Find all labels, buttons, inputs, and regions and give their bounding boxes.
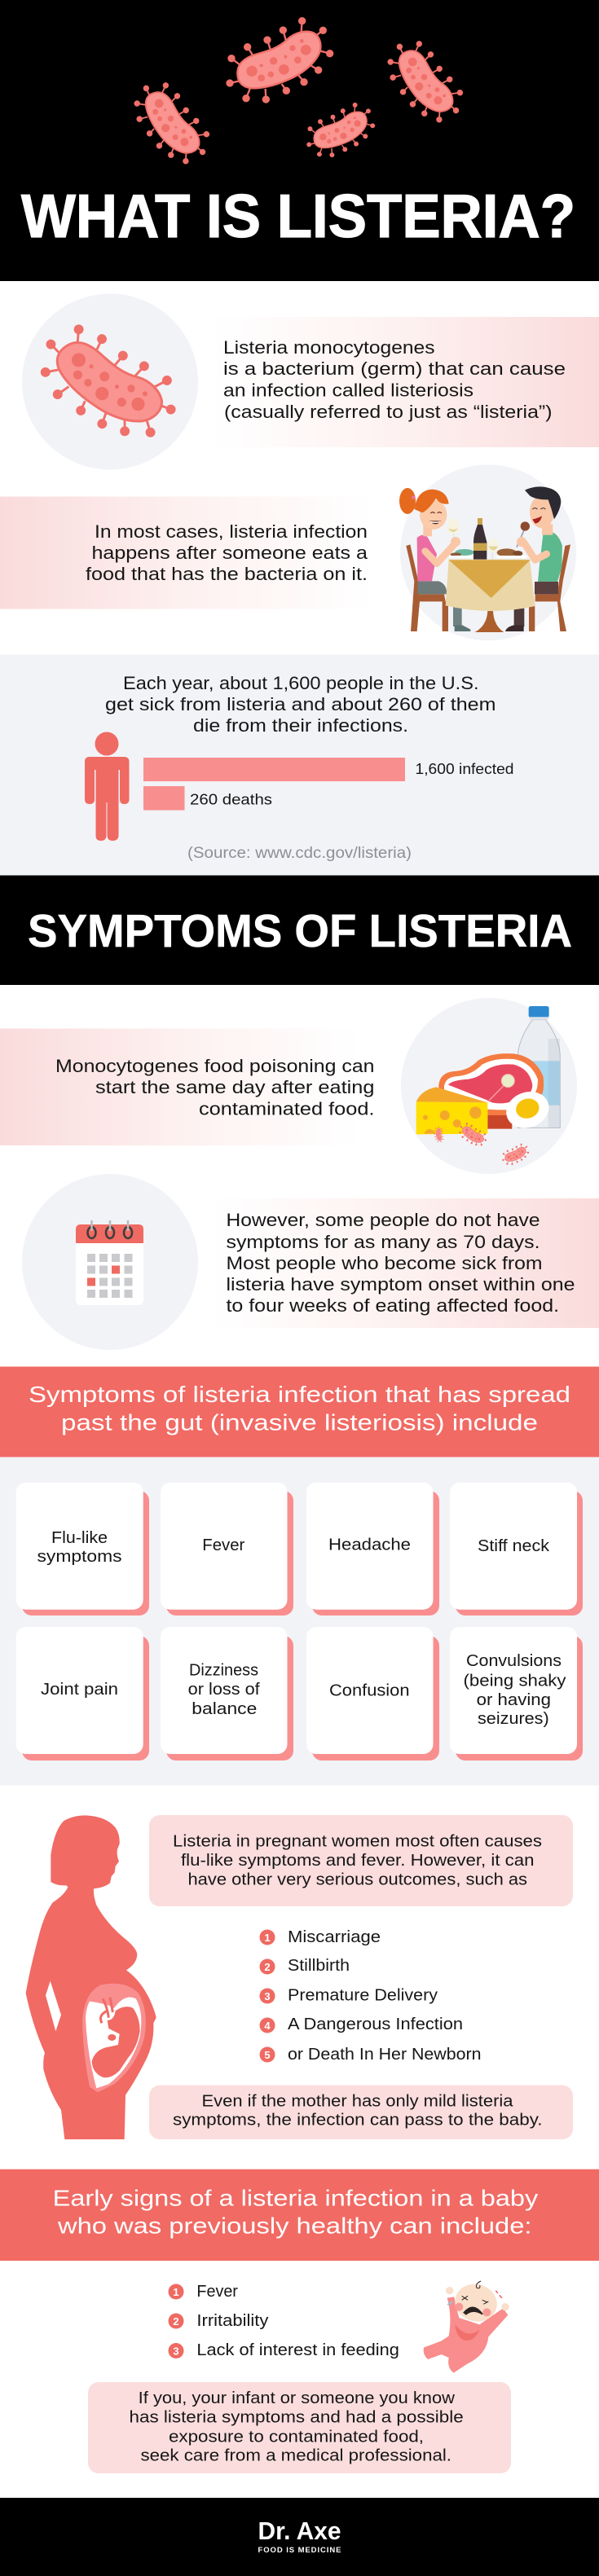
card: stiff neck: Stiff neck bbox=[478, 1537, 550, 1555]
text block: definition: (casually referred to just as “listeria”) bbox=[224, 402, 553, 422]
numbered list: outcomes: 3 bbox=[264, 1990, 271, 2002]
numbered list: baby signs: Lack of interest in feeding bbox=[196, 2341, 399, 2359]
numbered list: baby signs: 2 bbox=[173, 2315, 179, 2328]
card: fever: Fever bbox=[202, 1536, 245, 1554]
text block: delayed symptoms: to four weeks of eating affected food. bbox=[227, 1295, 559, 1316]
card: stiff neck bbox=[450, 1483, 583, 1615]
numbered list: outcomes: or Death In Her Newborn bbox=[288, 2046, 481, 2064]
callout: transmission to baby bbox=[149, 2086, 573, 2139]
card: convulsions: seizures) bbox=[478, 1710, 549, 1728]
bar chart: infected and deaths: 260 deaths bbox=[190, 792, 272, 808]
icon: right bacterium bbox=[383, 33, 468, 130]
icon: small bacterium bbox=[306, 103, 375, 157]
heading band: baby signs: Early signs of a listeria infection in a baby bbox=[53, 2185, 538, 2210]
panel: listeria definition bbox=[22, 293, 599, 470]
footer: Dr. Axe logo: FOOD IS MEDICINE bbox=[258, 2546, 341, 2555]
text block: definition: is a bacterium (germ) that can cause bbox=[223, 358, 566, 379]
numbered list: baby signs: 1 bbox=[173, 2286, 179, 2298]
panel: delayed symptoms bbox=[22, 1174, 599, 1350]
numbered list: outcomes: Premature Delivery bbox=[288, 1986, 438, 2004]
icon: calendar in circle bbox=[22, 1174, 198, 1350]
text block: definition: Listeria monocytogenes bbox=[223, 337, 435, 358]
footer: Dr. Axe logo bbox=[0, 2498, 599, 2576]
card: joint pain: Joint pain bbox=[41, 1681, 118, 1699]
text block: onset: contaminated food. bbox=[199, 1098, 375, 1119]
text block: delayed symptoms: symptoms for as many as 70 days. bbox=[227, 1232, 540, 1252]
text block: statistics bbox=[105, 673, 495, 736]
card: convulsions bbox=[450, 1627, 583, 1761]
numbered list: outcomes bbox=[259, 1928, 481, 2064]
illustration: crying baby bbox=[424, 2279, 509, 2373]
card: convulsions: or having bbox=[477, 1691, 551, 1709]
numbered list: outcomes: Stillbirth bbox=[288, 1957, 350, 1975]
callout: seek care: has listeria symptoms and had a possible bbox=[129, 2409, 464, 2427]
icon: bacterium in circle bbox=[22, 293, 198, 470]
icon: large bacterium bbox=[226, 17, 333, 103]
card: confusion bbox=[306, 1627, 439, 1761]
bar chart: infected and deaths: 1,600 infected bbox=[416, 761, 513, 777]
numbered list: outcomes: A Dangerous Infection bbox=[288, 2016, 463, 2033]
heading: SYMPTOMS OF LISTERIA bbox=[28, 905, 572, 957]
panel: symptom cards bbox=[0, 1457, 599, 1786]
text block: infection: In most cases, listeria infection bbox=[95, 521, 368, 542]
numbered list: baby signs: Fever bbox=[196, 2283, 238, 2301]
heading band: invasive listeriosis: Symptoms of listeria infection that has spread bbox=[29, 1382, 570, 1407]
numbered list: outcomes: 1 bbox=[264, 1932, 271, 1944]
callout: transmission to baby: symptoms, the infection can pass to the baby. bbox=[173, 2112, 543, 2130]
callout: pregnancy outcomes intro: Listeria in pregnant women most often causes bbox=[173, 1833, 542, 1851]
callout: seek care: seek care from a medical professional. bbox=[140, 2447, 451, 2465]
numbered list: outcomes: 4 bbox=[264, 2020, 271, 2032]
panel: baby symptoms bbox=[88, 2279, 511, 2473]
card: convulsions: Convulsions bbox=[466, 1652, 562, 1670]
card: headache bbox=[306, 1483, 439, 1615]
illustration: contaminated food bbox=[401, 998, 577, 1174]
text block: statistics: Each year, about 1,600 people in the U.S. bbox=[123, 673, 479, 693]
illustration: couple dining bbox=[399, 464, 576, 640]
callout: pregnancy outcomes intro bbox=[149, 1815, 573, 1906]
callout: seek care: exposure to contaminated food, bbox=[169, 2428, 424, 2446]
panel: food poisoning onset bbox=[0, 998, 577, 1174]
panel: how infection happens bbox=[0, 464, 576, 640]
numbered list: baby signs: 3 bbox=[173, 2345, 179, 2358]
footer: Dr. Axe logo: Dr. Axe bbox=[258, 2517, 341, 2545]
card: flu-like symptoms bbox=[16, 1483, 149, 1615]
card: fever bbox=[161, 1483, 293, 1615]
card: dizziness: Dizziness bbox=[189, 1662, 258, 1680]
card: flu-like symptoms: Flu-like bbox=[51, 1529, 108, 1547]
callout: seek care bbox=[88, 2382, 511, 2473]
text block: statistics: die from their infections. bbox=[193, 715, 408, 736]
bar chart: infected and deaths bbox=[143, 758, 513, 810]
panel: pregnancy bbox=[26, 1815, 573, 2139]
numbered list: outcomes: 5 bbox=[264, 2049, 271, 2061]
panel: symptoms header bbox=[0, 875, 599, 985]
text block: onset: Monocytogenes food poisoning can bbox=[55, 1056, 375, 1076]
heading band: baby signs bbox=[0, 2169, 599, 2261]
numbered list: outcomes: 2 bbox=[264, 1961, 271, 1973]
numbered list: baby signs: Irritability bbox=[196, 2312, 268, 2330]
card: headache: Headache bbox=[328, 1536, 411, 1554]
text block: onset: start the same day after eating bbox=[95, 1077, 374, 1097]
card: convulsions: (being shaky bbox=[463, 1672, 566, 1690]
text block: infection bbox=[86, 521, 368, 584]
card: flu-like symptoms: symptoms bbox=[37, 1548, 122, 1566]
card: dizziness bbox=[161, 1627, 293, 1761]
text block: delayed symptoms: Most people who become sick from bbox=[227, 1253, 543, 1273]
numbered list: outcomes: Miscarriage bbox=[288, 1928, 381, 1946]
numbered list: baby signs bbox=[168, 2283, 399, 2359]
text block: definition bbox=[223, 337, 566, 422]
text block: delayed symptoms: listeria have symptom onset within one bbox=[227, 1274, 575, 1295]
card: dizziness: or loss of bbox=[188, 1681, 260, 1699]
callout: pregnancy outcomes intro: flu-like symptoms and fever. However, it can bbox=[181, 1852, 535, 1870]
title: WHAT IS LISTERIA? bbox=[21, 182, 575, 250]
heading band: invasive listeriosis: past the gut (invasive listeriosis) include bbox=[61, 1409, 538, 1435]
icon: person bbox=[85, 732, 129, 841]
text block: infection: food that has the bacteria on it. bbox=[86, 564, 368, 584]
heading band: baby signs: who was previously healthy can include: bbox=[57, 2213, 532, 2239]
text block: infection: happens after someone eats a bbox=[91, 543, 368, 563]
card: dizziness: balance bbox=[192, 1700, 257, 1718]
text block: definition: an infection called listeriosis bbox=[223, 380, 473, 401]
panel: annual statistics bbox=[0, 655, 599, 875]
panel: title header bbox=[0, 0, 599, 281]
text block: delayed symptoms bbox=[227, 1210, 575, 1316]
heading band: invasive listeriosis bbox=[0, 1367, 599, 1457]
icon: left bacterium bbox=[130, 74, 214, 172]
text block: delayed symptoms: However, some people do not have bbox=[227, 1210, 540, 1230]
text block: onset bbox=[55, 1056, 375, 1119]
callout: pregnancy outcomes intro: have other very serious outcomes, such as bbox=[187, 1871, 527, 1889]
text block: statistics: get sick from listeria and about 260 of them bbox=[105, 694, 495, 714]
card: confusion: Confusion bbox=[329, 1681, 409, 1699]
illustration: pregnant woman silhouette bbox=[26, 1815, 156, 2139]
source note: (Source: www.cdc.gov/listeria) bbox=[187, 845, 412, 862]
callout: transmission to baby: Even if the mother has only mild listeria bbox=[202, 2092, 513, 2110]
card: joint pain bbox=[16, 1627, 149, 1761]
callout: seek care: If you, your infant or someone you know bbox=[139, 2389, 456, 2407]
